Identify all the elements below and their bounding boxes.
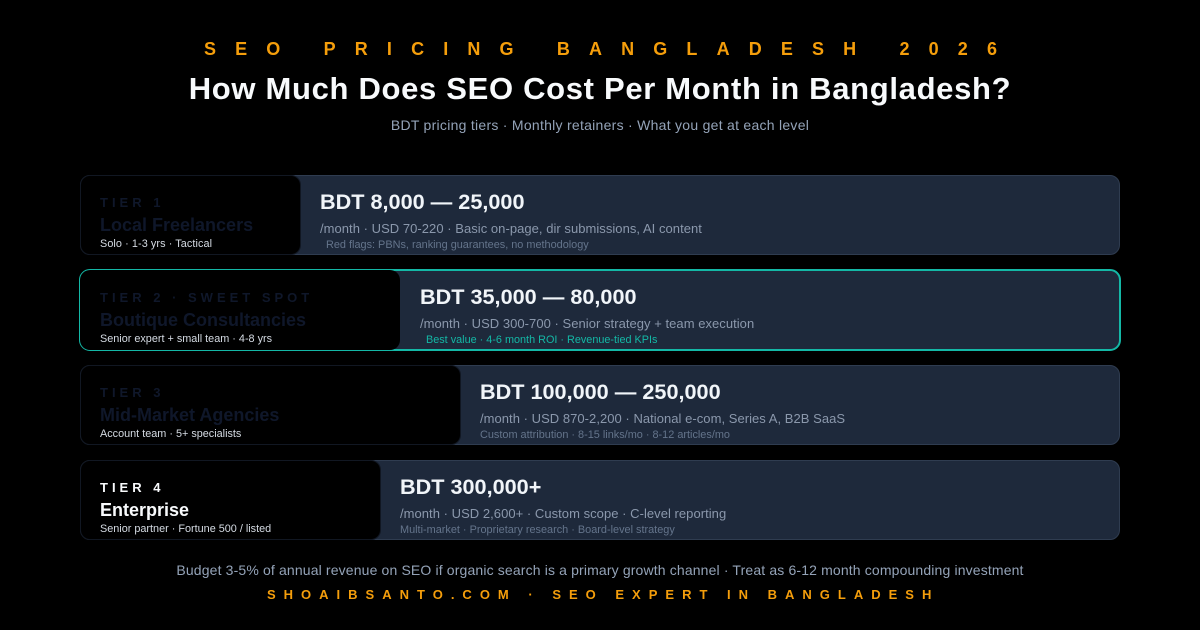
tier 2 label: TIER 2 · SWEET SPOT xyxy=(100,290,313,305)
tier 2 label block xyxy=(80,270,400,350)
tier 3 label block xyxy=(80,365,461,445)
tier 3 note: Custom attribution · 8-15 links/mo · 8-12 articles/mo xyxy=(480,429,730,441)
tier 2 description: /month · USD 300-700 · Senior strategy + team execution xyxy=(420,316,754,331)
tier 1 note: Red flags: PBNs, ranking guarantees, no methodology xyxy=(326,239,589,251)
tier 4 name: Enterprise xyxy=(100,500,189,520)
panel: tier 3 xyxy=(80,365,1120,445)
tier 2 name: Boutique Consultancies xyxy=(100,310,306,330)
eyebrow heading: SEO PRICING BANGLADESH 2026 xyxy=(204,39,1016,59)
tier 1 profile: Solo · 1-3 yrs · Tactical xyxy=(100,238,212,250)
tier 4 profile: Senior partner · Fortune 500 / listed xyxy=(100,523,271,535)
tier 1 price: BDT 8,000 — 25,000 xyxy=(320,189,524,214)
tier 2 price: BDT 35,000 — 80,000 xyxy=(420,284,637,309)
panel: tier 4 xyxy=(80,460,1120,540)
tier 3 profile: Account team · 5+ specialists xyxy=(100,428,241,440)
tier 3 description: /month · USD 870-2,200 · National e-com, Series A, B2B SaaS xyxy=(480,411,845,426)
tier 1 name: Local Freelancers xyxy=(100,215,253,235)
tier 4 description: /month · USD 2,600+ · Custom scope · C-level reporting xyxy=(400,506,726,521)
tier 2 profile: Senior expert + small team · 4-8 yrs xyxy=(100,333,272,345)
tier 4 note: Multi-market · Proprietary research · Board-level strategy xyxy=(400,524,675,536)
tier 1 label: TIER 1 xyxy=(100,195,164,210)
title: How Much Does SEO Cost Per Month in Bangladesh? xyxy=(189,71,1011,106)
tier 4 label block xyxy=(80,460,381,540)
tier 4 price: BDT 300,000+ xyxy=(400,474,541,499)
tier 4 label: TIER 4 xyxy=(100,480,164,495)
panel: tier 1 xyxy=(80,175,1120,255)
tier 1 label block xyxy=(80,175,301,255)
tier 3 label: TIER 3 xyxy=(100,385,164,400)
tier 3 name: Mid-Market Agencies xyxy=(100,405,279,425)
panel: tier 2 xyxy=(79,269,1121,351)
subtitle: BDT pricing tiers · Monthly retainers · What you get at each level xyxy=(391,117,809,133)
tier 1 description: /month · USD 70-220 · Basic on-page, dir submissions, AI content xyxy=(320,221,702,236)
footer credit: SHOAIBSANTO.COM · SEO EXPERT IN BANGLADESH xyxy=(267,587,939,602)
footer advice: Budget 3-5% of annual revenue on SEO if organic search is a primary growth channel · Treat as 6-12 month compounding investment xyxy=(176,562,1024,578)
tier 2 note: Best value · 4-6 month ROI · Revenue-tied KPIs xyxy=(426,334,657,346)
tier 3 price: BDT 100,000 — 250,000 xyxy=(480,379,721,404)
